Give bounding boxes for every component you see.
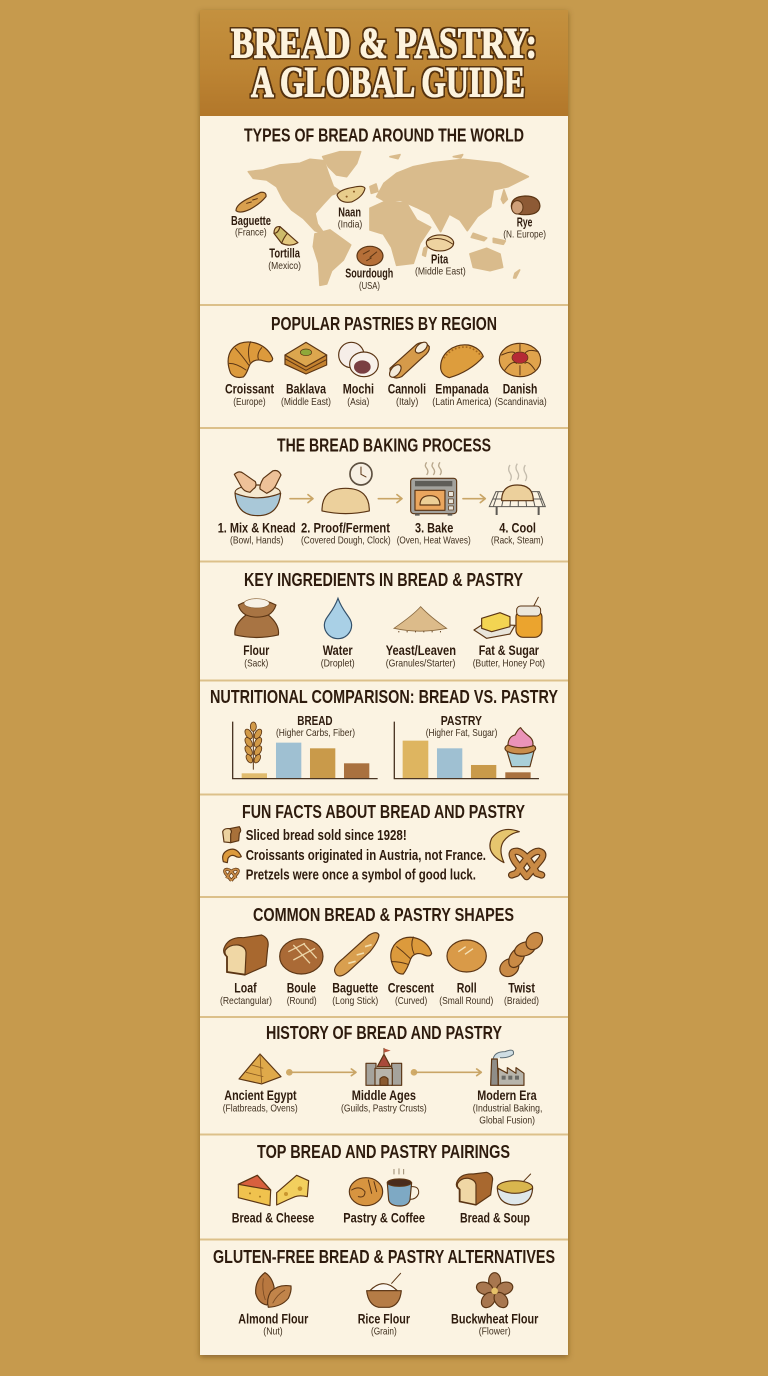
labels — [225, 380, 547, 408]
map labels: (Middle East) — [415, 265, 466, 277]
labels: (Italy) — [396, 396, 418, 408]
chart: pastry — [394, 722, 539, 779]
map labels: (India) — [338, 219, 362, 231]
icon: cooling rack with loaf — [489, 485, 545, 515]
labels: (Covered Dough, Clock) — [301, 535, 391, 547]
icon: cupcake — [505, 728, 536, 767]
labels: Ancient Egypt — [224, 1087, 297, 1103]
icon: holey cheese — [277, 1175, 309, 1205]
infographic card — [200, 10, 568, 1355]
icon: crescent — [391, 937, 432, 974]
icon: loaf — [456, 1172, 493, 1205]
heading: GLUTEN-FREE BREAD & PASTRY ALTERNATIVES — [213, 1246, 555, 1267]
chart titles: PASTRY — [441, 713, 482, 728]
labels: (Oven, Heat Waves) — [397, 535, 471, 547]
labels: Middle Ages — [352, 1087, 416, 1103]
labels: (Industrial Baking, — [473, 1103, 542, 1115]
icon: clock — [350, 463, 372, 485]
labels: (Nut) — [263, 1325, 283, 1337]
map labels: Naan — [338, 206, 361, 220]
icon: oven — [411, 478, 457, 516]
labels: (Middle East) — [281, 396, 331, 408]
labels: (Rectangular) — [220, 995, 272, 1007]
labels: (Scandinavia) — [495, 396, 547, 408]
map labels: (Mexico) — [268, 260, 301, 272]
map labels: (France) — [235, 227, 267, 239]
arrow — [463, 495, 485, 503]
labels — [223, 1087, 542, 1126]
icon: almonds — [256, 1273, 291, 1307]
labels: Bread & Cheese — [232, 1209, 314, 1225]
chart titles: BREAD — [297, 713, 333, 728]
labels: (Flower) — [479, 1325, 511, 1337]
labels: Fat & Sugar — [479, 642, 539, 658]
labels — [218, 519, 543, 547]
labels: Boule — [287, 979, 316, 995]
heading: THE BREAD BAKING PROCESS — [277, 435, 491, 456]
labels: (Round) — [287, 995, 317, 1007]
panel: fun facts — [200, 796, 568, 896]
heading: FUN FACTS ABOUT BREAD AND PASTRY — [242, 801, 525, 822]
icon: covered dough — [322, 488, 369, 514]
labels: Danish — [503, 380, 537, 396]
panel: popular pastries — [200, 306, 568, 428]
panel: key ingredients — [200, 562, 568, 680]
icon: pyramid — [239, 1054, 281, 1084]
icon: danish — [499, 343, 541, 377]
labels: Water — [323, 642, 353, 658]
icon: factory — [491, 1050, 524, 1085]
map labels: Tortilla — [269, 247, 301, 261]
labels: Baguette — [332, 979, 378, 995]
labels: (Sack) — [244, 658, 268, 670]
labels: (Bowl, Hands) — [230, 535, 283, 547]
icon: bowl and hands — [234, 470, 281, 516]
labels: Twist — [508, 979, 535, 995]
chart: bread — [233, 722, 378, 779]
labels: Almond Flour — [238, 1310, 309, 1326]
panel: baking process — [200, 429, 568, 561]
icon: cheese wedge — [238, 1175, 271, 1206]
labels: Pastry & Coffee — [343, 1209, 425, 1225]
icon: small croissant — [223, 849, 241, 863]
icon: coffee cup — [387, 1179, 419, 1206]
icon: tortilla — [274, 227, 298, 245]
icon: wheat — [243, 722, 263, 769]
labels: Buckwheat Flour — [451, 1310, 539, 1326]
map labels: Sourdough — [345, 266, 393, 280]
icon: baklava — [285, 342, 327, 374]
heading: HISTORY OF BREAD AND PASTRY — [266, 1022, 503, 1043]
labels: 3. Bake — [415, 519, 453, 535]
icon: boule — [280, 939, 323, 974]
heading: TYPES OF BREAD AROUND THE WORLD — [244, 124, 524, 146]
labels: Loaf — [234, 979, 257, 995]
labels: Global Fusion) — [479, 1114, 535, 1126]
icon: loaf — [224, 935, 268, 975]
labels: Crescent — [388, 979, 434, 995]
icon: mochi — [339, 342, 378, 377]
labels — [238, 1310, 539, 1337]
icon: roll — [447, 940, 486, 972]
panel: types of bread — [200, 116, 568, 305]
labels: (Braided) — [504, 995, 539, 1007]
heading: POPULAR PASTRIES BY REGION — [271, 313, 497, 334]
labels: (Grain) — [371, 1325, 397, 1337]
arrow: egypt to middle ages — [286, 1069, 356, 1076]
labels: Croissant — [225, 380, 274, 396]
heading: NUTRITIONAL COMPARISON: BREAD VS. PASTRY — [210, 686, 559, 707]
labels: Empanada — [435, 380, 489, 396]
labels: (Guilds, Pastry Crusts) — [341, 1103, 427, 1115]
map labels: (USA) — [359, 280, 380, 292]
icon: crescent moon — [490, 829, 519, 863]
labels: (Butter, Honey Pot) — [473, 658, 545, 670]
labels: Modern Era — [477, 1087, 537, 1103]
labels: Baklava — [286, 380, 326, 396]
panel: gluten-free alternatives — [200, 1240, 568, 1355]
labels — [232, 1209, 530, 1225]
icon: cannoli — [387, 340, 429, 379]
labels: (Granules/Starter) — [386, 658, 455, 670]
icon: yeast pile — [394, 607, 447, 632]
arrow — [378, 495, 402, 503]
icon: pastry — [349, 1178, 383, 1206]
labels: (Droplet) — [321, 658, 355, 670]
facts: Pretzels were once a symbol of good luck. — [246, 867, 476, 883]
map labels: Baguette — [231, 214, 271, 228]
icon: buckwheat flower — [475, 1273, 514, 1310]
labels: Bread & Soup — [460, 1209, 530, 1225]
panel: pairings — [200, 1136, 568, 1238]
labels: 1. Mix & Knead — [218, 519, 296, 535]
labels: 4. Cool — [499, 519, 536, 535]
icon: water drop — [324, 598, 352, 639]
header banner — [200, 10, 568, 116]
labels: (Rack, Steam) — [491, 535, 543, 547]
labels: (Asia) — [347, 396, 369, 408]
icon: pita — [426, 235, 454, 251]
facts: Sliced bread sold since 1928! — [246, 828, 407, 844]
icon: flour sack — [235, 599, 279, 637]
icon: heat waves — [425, 462, 441, 475]
icon: castle — [366, 1048, 402, 1085]
map labels — [231, 206, 546, 292]
bread icons on map — [236, 186, 540, 266]
labels: 2. Proof/Ferment — [301, 519, 390, 535]
labels: Cannoli — [388, 380, 426, 396]
icon: steam — [509, 464, 527, 481]
chart titles: (Higher Fat, Sugar) — [426, 727, 497, 739]
icon: small pretzel — [225, 869, 238, 881]
labels: (Small Round) — [439, 995, 493, 1007]
title line 1: BREAD & PASTRY: — [231, 20, 537, 68]
icon: rye — [511, 196, 540, 215]
title line 2: A GLOBAL GUIDE — [251, 60, 525, 106]
icon: soup bowl — [497, 1174, 533, 1205]
map labels: (N. Europe) — [503, 229, 546, 241]
icon: baguette — [236, 192, 266, 212]
labels: Flour — [243, 642, 270, 658]
heading: TOP BREAD AND PASTRY PAIRINGS — [257, 1141, 510, 1162]
labels: (Flatbreads, Ovens) — [223, 1103, 298, 1115]
labels: Yeast/Leaven — [386, 642, 456, 658]
labels — [220, 979, 539, 1007]
labels: Roll — [457, 979, 477, 995]
icon: naan — [337, 186, 365, 202]
labels: Rice Flour — [358, 1310, 410, 1326]
icon: croissant — [228, 342, 273, 377]
icon: honey pot — [516, 597, 542, 637]
arrow: middle ages to modern — [411, 1069, 481, 1076]
icon: twist — [496, 929, 546, 980]
chart titles — [276, 713, 497, 739]
panel: history — [200, 1018, 568, 1134]
labels: (Europe) — [233, 396, 266, 408]
labels: Mochi — [343, 380, 374, 396]
panel: nutritional comparison — [200, 682, 568, 794]
heading: COMMON BREAD & PASTRY SHAPES — [253, 904, 514, 925]
world map — [248, 152, 528, 285]
icon: pretzel — [512, 851, 543, 877]
labels — [243, 642, 545, 670]
icon: sourdough — [357, 246, 383, 266]
map labels: Rye — [517, 216, 532, 230]
labels: (Curved) — [395, 995, 427, 1007]
labels: (Long Stick) — [332, 995, 378, 1007]
icon: coffee steam — [394, 1168, 404, 1174]
icon: rice bowl — [367, 1273, 401, 1307]
facts: Croissants originated in Austria, not France. — [246, 848, 486, 864]
icon: empanada — [441, 345, 483, 378]
arrow — [290, 495, 313, 503]
labels: (Latin America) — [432, 396, 492, 408]
icon: butter on plate — [474, 613, 515, 638]
icon: sliced bread — [223, 827, 241, 843]
facts — [246, 828, 486, 883]
heading: KEY INGREDIENTS IN BREAD & PASTRY — [244, 569, 524, 590]
map labels: Pita — [431, 252, 449, 266]
icon: baguette — [335, 933, 379, 976]
chart titles: (Higher Carbs, Fiber) — [276, 727, 355, 739]
panel: shapes — [200, 898, 568, 1017]
